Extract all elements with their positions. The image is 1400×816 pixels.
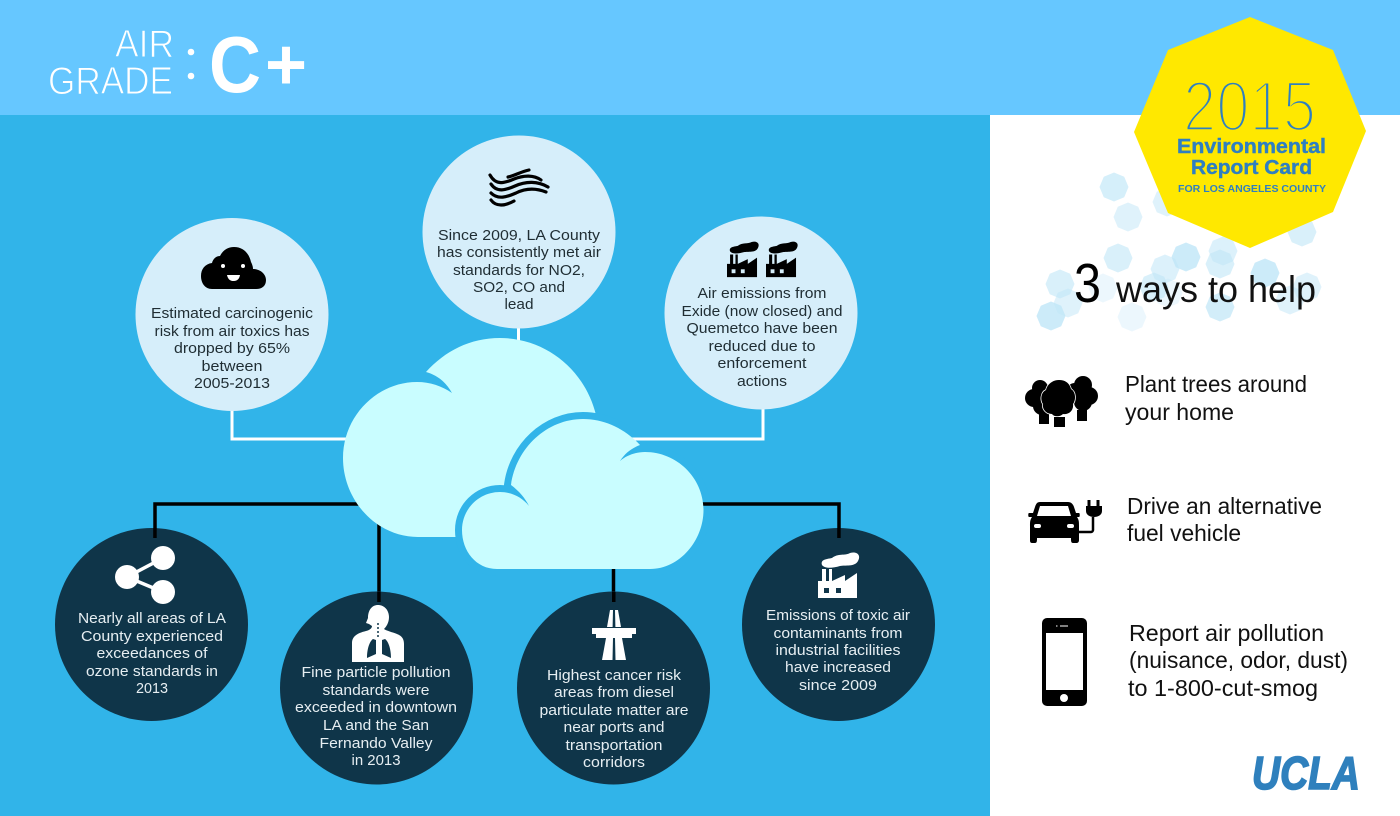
connector stub: fine particles (377, 592, 381, 602)
icon: smartphone (1042, 618, 1087, 706)
text: diesel: particulate matter are (540, 703, 688, 719)
text: plant trees: your home (1125, 399, 1234, 425)
text: carcinogenic risk: Estimated carcinogenic (151, 306, 313, 322)
text: diesel: Highest cancer risk (547, 668, 682, 684)
badge: 2015 environmental report card: Report Card (1191, 157, 1312, 179)
connector lines (155, 325, 518, 602)
icon: two factories (727, 242, 798, 277)
logo: UCLA: UCLA (1252, 747, 1360, 799)
title: air grade C+: AIR (115, 23, 174, 66)
icon: trees (1025, 376, 1098, 427)
text: report pollution: Report air pollution (1129, 620, 1324, 646)
icon: person with lungs (352, 605, 404, 662)
text: alternative fuel: fuel vehicle (1127, 520, 1241, 546)
decorative bubbles (1036, 172, 1322, 332)
item: report pollution (1042, 618, 1348, 706)
text: fine particles: Fernando Valley (320, 736, 433, 752)
badge: 2015 environmental report card: 2015 (1183, 68, 1316, 147)
text: diesel: corridors (583, 755, 645, 771)
panel: fine particles (280, 592, 473, 784)
icon: highway overpass (592, 610, 636, 660)
text: ozone: 2013 (136, 681, 168, 697)
item: alternative fuel (1028, 493, 1322, 546)
text: air standards (437, 228, 601, 313)
text: carcinogenic risk: between (202, 359, 262, 375)
badge: 2015 environmental report card (1134, 17, 1366, 248)
text: toxic emissions (766, 608, 910, 694)
panel: carcinogenic risk (136, 218, 328, 411)
text: alternative fuel: Drive an alternative (1127, 493, 1322, 519)
panel: air standards (422, 136, 616, 328)
text: air emissions: Exide (now closed) and (682, 304, 842, 320)
text: report pollution: to 1-800-cut-smog (1128, 675, 1318, 701)
panel: diesel (517, 592, 710, 784)
text: carcinogenic risk: 2005-2013 (194, 376, 270, 392)
text: fine particles: in 2013 (352, 753, 400, 769)
item: plant trees (1025, 371, 1307, 427)
text: fine particles: standards were (322, 683, 430, 699)
title: air grade C+: + (265, 25, 307, 105)
badge: 2015 environmental report card: FOR LOS ANGELES COUNTY (1178, 183, 1326, 195)
title: air grade C+: GRADE (48, 60, 173, 103)
connector stub: ozone (153, 528, 157, 538)
text: diesel: areas from diesel (554, 685, 674, 701)
text: ozone: ozone standards in (86, 664, 218, 680)
text: air standards: standards for NO2, (453, 263, 585, 279)
text: ozone: exceedances of (96, 646, 209, 662)
text: air emissions: reduced due to (708, 339, 816, 355)
text: ozone: Nearly all areas of LA (78, 611, 226, 627)
panel: air emissions (664, 216, 858, 410)
icon: share nodes (115, 546, 175, 604)
text: air standards: lead (504, 297, 534, 313)
text: report pollution: (nuisance, odor, dust) (1129, 647, 1348, 673)
text: air standards: SO2, CO and (473, 280, 565, 296)
text: diesel: near ports and (564, 720, 664, 736)
heading: 3 ways to help (1074, 252, 1316, 314)
text: carcinogenic risk (151, 306, 313, 392)
text: report pollution (1128, 620, 1348, 701)
text: toxic emissions: contaminants from (774, 626, 902, 642)
icon: factory (818, 553, 859, 598)
text: air standards: has consistently met air (437, 245, 601, 261)
text: fine particles: Fine particle pollution (302, 665, 450, 681)
badge: 2015 environmental report card: Environmental (1177, 136, 1326, 158)
text: air emissions (682, 286, 842, 390)
text: alternative fuel (1127, 493, 1322, 546)
header band (0, 0, 1400, 115)
text: air emissions: Air emissions from (698, 286, 826, 302)
text: air standards: Since 2009, LA County (438, 228, 601, 244)
connector stub: toxic emissions (837, 528, 841, 538)
text: air emissions: actions (737, 374, 787, 390)
cloud: large (343, 338, 600, 537)
text: diesel: transportation (566, 738, 662, 754)
text: air emissions: Quemetco have been (686, 321, 838, 337)
text: fine particles: LA and the San (323, 718, 429, 734)
text: toxic emissions: since 2009 (799, 678, 877, 694)
text: fine particles (295, 665, 457, 769)
title: air grade C+ (48, 20, 307, 109)
text: plant trees: Plant trees around (1125, 371, 1307, 397)
connector lines right (614, 405, 839, 602)
text: carcinogenic risk: risk from air toxics has (154, 324, 310, 340)
panel: toxic emissions (742, 528, 935, 721)
icon: electric car (1028, 500, 1102, 543)
text: air emissions: enforcement (718, 356, 806, 372)
text: plant trees (1125, 371, 1307, 425)
text: toxic emissions: industrial facilities (776, 643, 900, 659)
connector stub: diesel (612, 592, 616, 602)
icon: wind (490, 170, 548, 205)
cloud: small (462, 419, 704, 569)
cloud ring (462, 419, 704, 569)
text: toxic emissions: have increased (785, 660, 891, 676)
text: carcinogenic risk: dropped by 65% (174, 341, 290, 357)
text: fine particles: exceeded in downtown (295, 700, 457, 716)
heading: 3 ways to help: ways to help (1115, 269, 1316, 310)
text: ozone (78, 611, 226, 697)
main blue panel (0, 115, 990, 816)
text: ozone: County experienced (81, 629, 223, 645)
text: diesel (540, 668, 688, 771)
text: toxic emissions: Emissions of toxic air (766, 608, 910, 624)
panel: ozone (55, 528, 248, 721)
icon: smiling cloud (201, 247, 266, 289)
title: air grade C+: C (209, 20, 261, 109)
heading: 3 ways to help: 3 (1074, 252, 1101, 314)
